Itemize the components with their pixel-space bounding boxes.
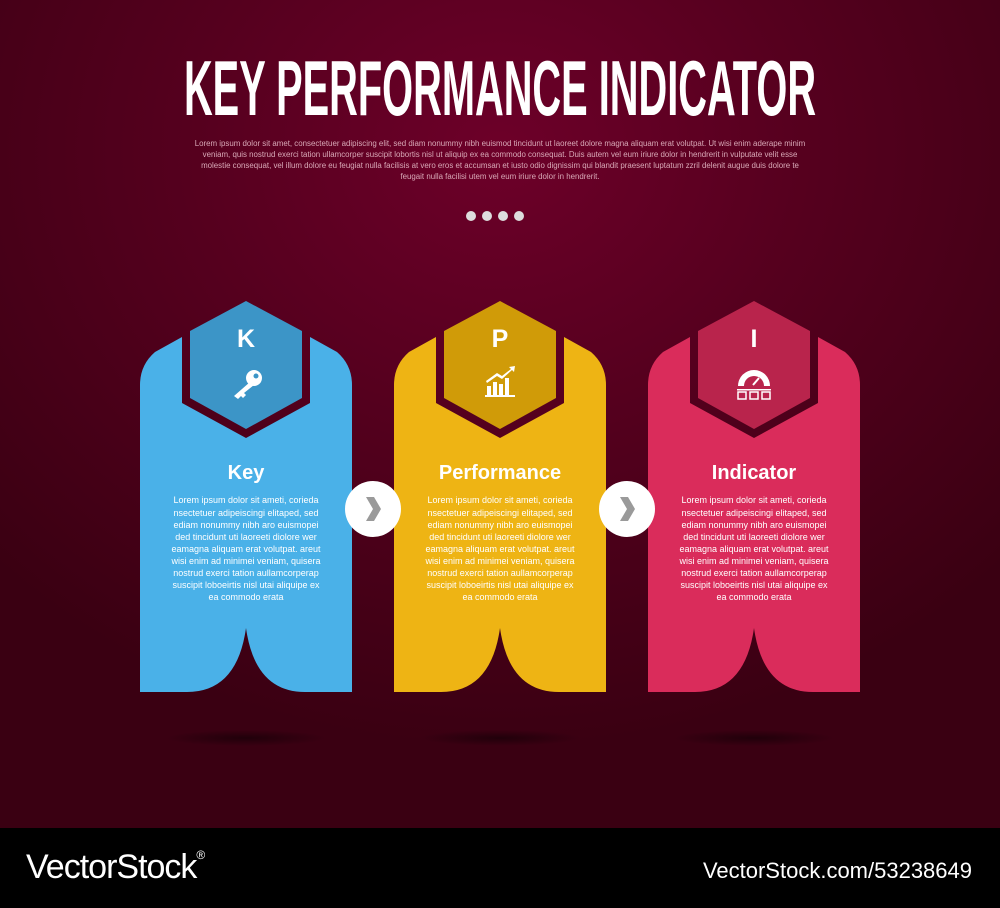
icon: key (234, 370, 262, 399)
card: Key: Key (228, 462, 265, 484)
card: Performance: suscipit loboeirtis nisl utai aliquipe ex (426, 580, 574, 590)
card: Key: ea commodo erata (208, 592, 284, 602)
title: KEY PERFORMANCE INDICATOR (184, 44, 816, 132)
card: Key: suscipit loboeirtis nisl utai aliquipe ex (172, 580, 320, 590)
card: Performance: wisi enim ad minimei veniam, quisera (424, 556, 575, 566)
icon: growth chart (485, 366, 515, 397)
card: Performance: nsectetuer adipeiscingi elitaped, sed (427, 508, 573, 518)
card: Indicator: I (751, 325, 757, 353)
card: Indicator: nsectetuer adipeiscingi elitaped, sed (681, 508, 827, 518)
card: Performance: ea commodo erata (462, 592, 538, 602)
card: Key: eamagna aliquam erat volutpat. areut (171, 544, 321, 554)
dots (466, 211, 524, 221)
card: Key: wisi enim ad minimei veniam, quisera (170, 556, 321, 566)
arrow 1 (345, 481, 401, 537)
card: Indicator: ded tincidunt uti laoreeti diolore wer (683, 532, 825, 542)
card: Key: ded tincidunt uti laoreeti diolore wer (175, 532, 317, 542)
card: Key: ediam nonummy nibh aro euismopei (173, 520, 319, 530)
card: Key: Lorem ipsum dolor sit ameti, corieda (173, 495, 319, 505)
card: Indicator: ediam nonummy nibh aro euismopei (681, 520, 827, 530)
card: Indicator: suscipit loboeirtis nisl utai aliquipe ex (680, 580, 828, 590)
card: Performance: eamagna aliquam erat volutpat. areut (425, 544, 575, 554)
card: Performance: Lorem ipsum dolor sit ameti, corieda (427, 495, 573, 505)
card: Performance: ded tincidunt uti laoreeti diolore wer (429, 532, 571, 542)
card: Indicator (648, 301, 860, 746)
card: Indicator: Lorem ipsum dolor sit ameti, corieda (681, 495, 827, 505)
card: Performance: nostrud exerci tation aullamcorperap (427, 568, 573, 578)
footer (0, 828, 1000, 908)
arrow 2 (599, 481, 655, 537)
card: Performance: P (492, 325, 508, 353)
card: Key: nostrud exerci tation aullamcorperap (173, 568, 319, 578)
card: Indicator: ea commodo erata (716, 592, 792, 602)
card: Key (140, 301, 352, 746)
card: Performance: ediam nonummy nibh aro euismopei (427, 520, 573, 530)
card: Key: K (237, 325, 255, 353)
card: Key: nsectetuer adipeiscingi elitaped, sed (173, 508, 319, 518)
icon: gauge (737, 370, 771, 399)
card: Indicator: nostrud exerci tation aullamcorperap (681, 568, 827, 578)
card: Performance: Performance (439, 462, 561, 484)
card: Indicator: Indicator (712, 462, 796, 484)
card: Indicator: eamagna aliquam erat volutpat. areut (679, 544, 829, 554)
card: Performance (394, 301, 606, 746)
subtitle text: Lorem ipsum dolor sit amet, consectetuer adipiscing elit, sed diam nonummy nibh euismod tincidunt ut laoreet dolore magna aliquam erat volutpat. Ut wisi enim aderape minim veniam, quis nostrud exerci tation ullamcorper suscipit lobortis nisl ut aliquip ex ea commodo consequat. Duis autem vel eum iriure dolor in hendrerit in vulputate velit esse molestie consequat, vel illum dolore eu feugiat nulla facilisis at vero eros et accumsan et iusto odio dignissim qui blandit praesent luptatum zzril delenit augue duis dolore te feugait nulla facilisi utem vel eum iriure dolor in hendrerit. (195, 139, 805, 181)
card: Indicator: wisi enim ad minimei veniam, quisera (678, 556, 829, 566)
footer: VectorStock® (26, 848, 204, 886)
footer: VectorStock.com/53238649 (703, 858, 972, 883)
